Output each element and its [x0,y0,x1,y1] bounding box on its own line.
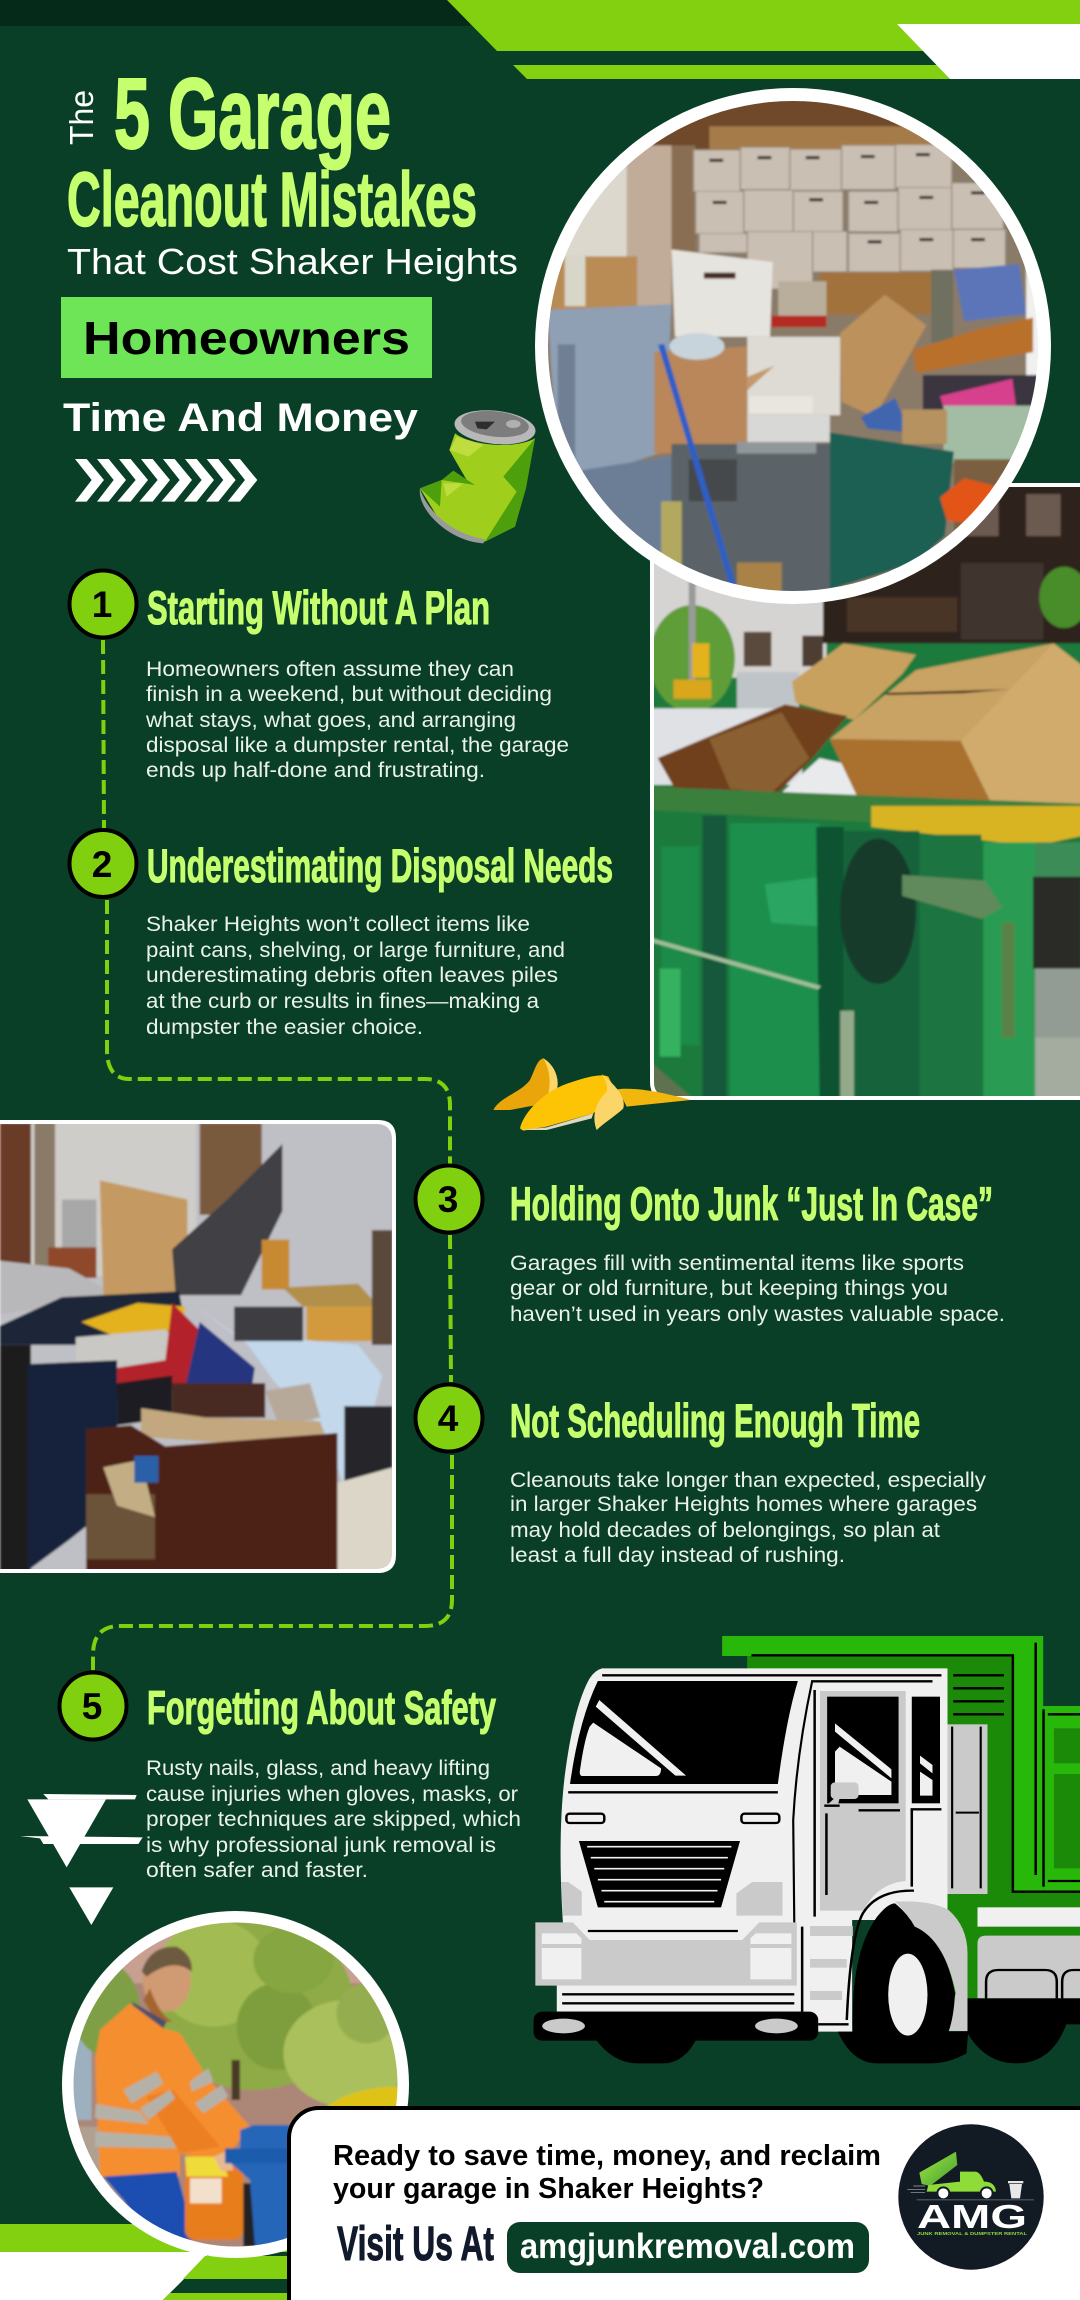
step 1: 1 [92,584,112,625]
step 5: Forgetting About Safety [147,1681,496,1734]
call to action panel: your garage in Shaker Heights? [333,2173,764,2205]
step 1 [70,570,569,782]
call to action panel [289,2108,1080,2300]
connector: steps 4 and 5 [93,1455,452,1670]
connector: steps 3 and 4 [450,1235,451,1382]
icon: chevron arrows [75,459,257,502]
step 2: Shaker Heights won’t collect items like [146,913,530,936]
call to action panel: amgjunkremoval.com [520,2227,855,2266]
photo: worker with bins [62,1911,410,2258]
logo: AMG: AMG [917,2198,1027,2235]
step 4: in larger Shaker Heights homes where garages [510,1493,977,1516]
title [61,58,518,440]
step 2: dumpster the easier choice. [146,1016,423,1039]
step 1: Homeowners often assume they can [146,658,514,681]
call to action text: Ready to save time, money, and reclaim [333,2140,881,2172]
icon: down arrows [20,1794,143,1925]
title: Cleanout Mistakes [67,157,477,243]
step 5: cause injuries when gloves, masks, or [146,1783,518,1806]
step 2: Underestimating Disposal Needs [147,839,613,892]
top header bars [0,0,1080,79]
step 2: paint cans, shelving, or large furniture, and [146,939,565,962]
step 3: haven’t used in years only wastes valuable space. [510,1303,1005,1326]
step 1: what stays, what goes, and arranging [145,709,516,732]
step 5: 5 [82,1686,102,1727]
step 5: often safer and faster. [146,1859,368,1882]
title: Homeowners [83,312,410,364]
step 3: 3 [438,1179,458,1220]
step 5: is why professional junk removal is [146,1834,496,1857]
step 4: 4 [438,1398,459,1439]
step 1: Starting Without A Plan [147,581,490,634]
step 4: Cleanouts take longer than expected, especially [510,1469,987,1492]
title: The [63,90,100,145]
step 2 [70,830,613,1039]
step 1: ends up half-done and frustrating. [146,759,485,782]
step 5: Rusty nails, glass, and heavy lifting [146,1757,490,1780]
step 4 [416,1384,987,1567]
step 1: disposal like a dumpster rental, the garage [146,734,569,757]
step 3: Garages fill with sentimental items like sports [510,1252,964,1275]
step 2: at the curb or results in fines—making a [146,990,539,1013]
logo truck [907,2152,1034,2200]
step 5 [60,1672,521,1882]
connector: steps 2 and 3 [107,900,450,1164]
step 3 [416,1166,1005,1326]
title: That Cost Shaker Heights [67,241,518,282]
photo: overflowing dumpster [647,479,1080,1106]
photo: cluttered workshop [0,1119,399,1575]
logo: AMG: JUNK REMOVAL & DUMPSTER RENTAL [917,2231,1027,2236]
step 3: gear or old furniture, but keeping things you [510,1277,948,1300]
step 1: finish in a weekend, but without deciding [146,683,552,706]
step 2: 2 [92,844,112,885]
step 4: least a full day instead of rushing. [510,1544,845,1567]
call to action panel: Visit Us At [337,2218,494,2271]
photo: cluttered garage circle [530,84,1067,612]
title: 5 Garage [114,58,391,170]
bottom footer bars [0,2224,300,2300]
logo: AMG [898,2124,1044,2270]
icon: crushed green can [420,407,537,543]
step 4: may hold decades of belongings, so plan at [510,1519,940,1542]
icon: banana peel [493,1058,691,1131]
step 2: underestimating debris often leaves piles [146,964,558,987]
title: Time And Money [63,396,419,440]
step 5: proper techniques are skipped, which [146,1808,521,1831]
connector: steps 1 and 2 [103,640,104,828]
truck illustration [534,1636,1080,2063]
